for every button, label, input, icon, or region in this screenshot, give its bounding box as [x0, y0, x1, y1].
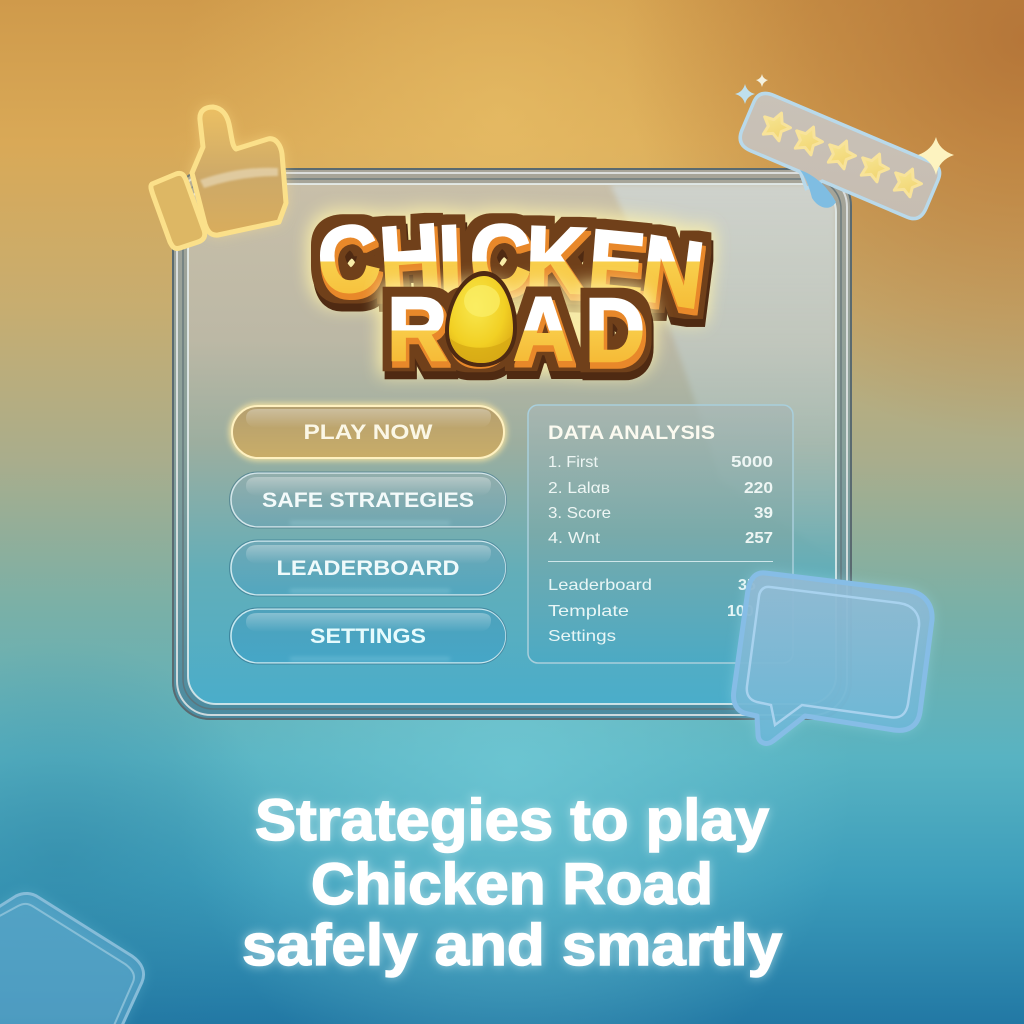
rating stars [758, 108, 925, 199]
title: strategies to play Chicken Road safely and smartly: Chicken Road [311, 852, 713, 917]
table rows [548, 454, 773, 547]
icon: speech bubble [734, 573, 932, 743]
glass panel frame [172, 168, 852, 720]
icon: five star rating bubble [731, 89, 943, 235]
logo: Chicken Road [312, 202, 709, 381]
table rows: 1. First [548, 454, 599, 471]
button: safe strategies: SAFE STRATEGIES [262, 488, 474, 512]
icon: golden egg [445, 271, 517, 367]
logo word: CHICKEN: CHICKEN [312, 202, 709, 328]
secondary rows: 35 [738, 577, 756, 594]
button: leaderboard: LEADERBOARD [276, 556, 460, 580]
logo word: ROAD: ROAD [387, 280, 645, 381]
menu buttons [229, 403, 507, 664]
button: settings [230, 608, 506, 664]
table rows: 5000 [731, 454, 773, 471]
icon: sparkles [735, 74, 954, 175]
table rows: 220 [744, 480, 773, 497]
button: leaderboard [230, 540, 506, 596]
secondary rows: Leaderboard [548, 577, 652, 594]
table rows: 2. Lalαв [548, 480, 610, 497]
button: safe strategies [230, 472, 506, 528]
drip over frame corner [800, 170, 836, 208]
heading: data analysis: DATA ANALYSIS [548, 423, 715, 444]
title: strategies to play Chicken Road safely and smartly [242, 788, 782, 978]
icon: partial glass tile [0, 893, 144, 1024]
icon: thumbs up [151, 107, 286, 249]
table rows: 257 [745, 530, 773, 547]
table rows: 3. Score [548, 505, 611, 522]
secondary rows [548, 577, 756, 645]
secondary rows: Template [548, 603, 629, 620]
title: strategies to play Chicken Road safely and smartly: safely and smartly [242, 913, 782, 978]
secondary rows: 100 [727, 603, 754, 620]
glass reflection [610, 185, 835, 494]
button: play now [229, 403, 507, 461]
button: settings: SETTINGS [310, 624, 426, 648]
secondary rows: Settings [548, 628, 616, 645]
title: strategies to play Chicken Road safely and smartly: Strategies to play [255, 788, 769, 853]
table rows: 4. Wnt [548, 530, 601, 547]
table rows: 39 [754, 505, 773, 522]
panel: data analysis [528, 405, 793, 663]
button: play now: PLAY NOW [304, 420, 433, 444]
